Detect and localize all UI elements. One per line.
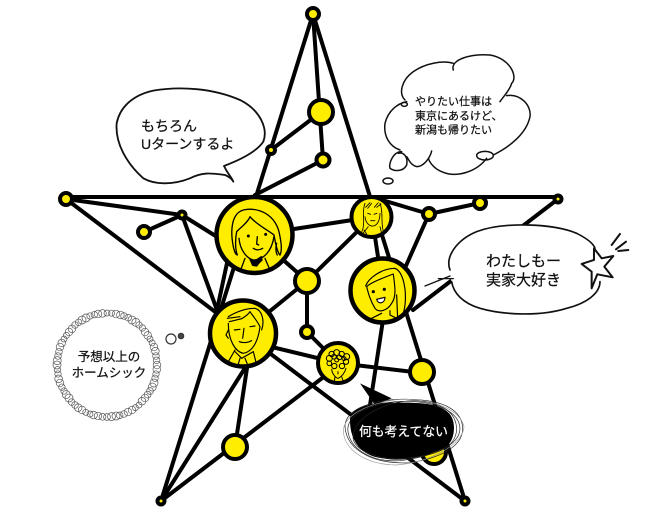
emphasis marks (612, 234, 628, 251)
thought bubble: 東京 (383, 55, 530, 184)
thought text: 東京にあるけど、 (415, 110, 502, 122)
speech text: 実家大好き (486, 272, 561, 289)
scribble bubble: ホームシック (48, 306, 184, 425)
thought text: やりたい仕事は (415, 95, 492, 108)
portrait: man with goatee (216, 197, 292, 273)
scribble text: 何も考えてない (359, 424, 448, 439)
scribble text: ホームシック (72, 366, 146, 380)
icon: star (582, 248, 613, 288)
scribbled black bubble (343, 383, 464, 465)
portrait: smiling woman (350, 258, 414, 322)
star network lines (66, 14, 558, 501)
speech bubble: わたしもー実家大好き (425, 225, 628, 314)
speech bubble: もちろんUターンするよ (117, 88, 265, 183)
scribble text: 予想以上の (78, 349, 140, 364)
portrait: woman with long hair, small (352, 197, 392, 237)
speech text: もちろん (141, 118, 197, 134)
network nodes (60, 8, 562, 504)
portrait: man in suit (210, 300, 276, 366)
thought text: 新潟も帰りたい (415, 124, 492, 136)
speech text: Uターンするよ (141, 136, 234, 152)
speech text: わたしもー (486, 253, 561, 270)
portrait: curly-haired man with glasses (318, 343, 358, 383)
